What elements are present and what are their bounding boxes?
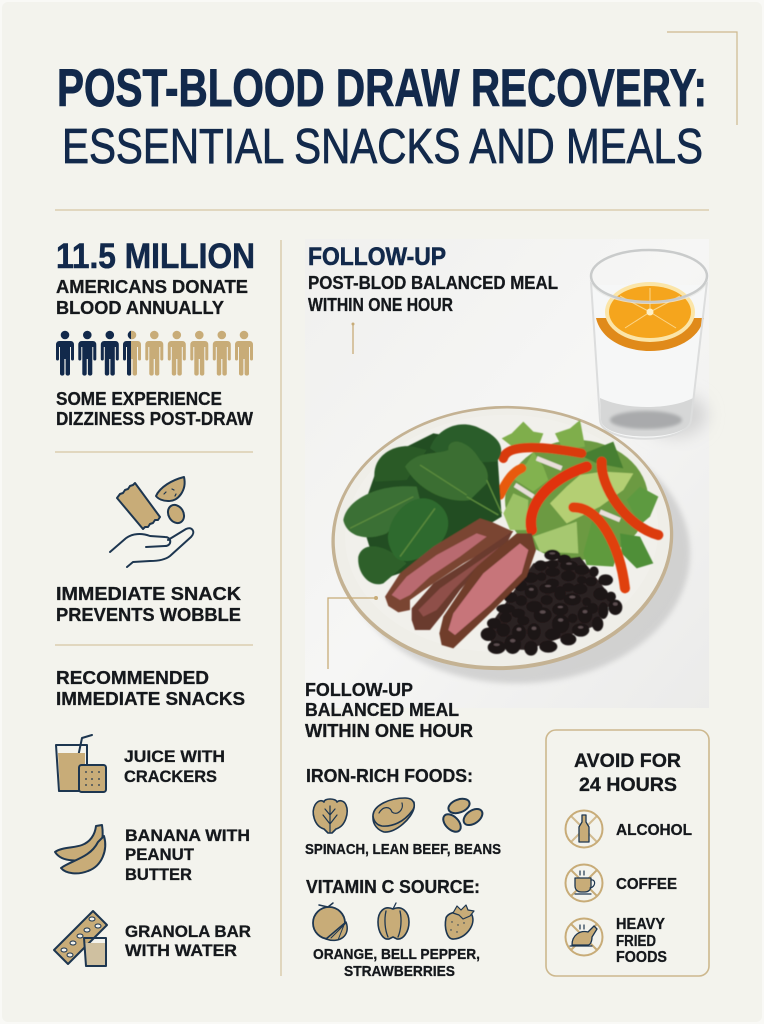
icon: snack falling into hand (110, 477, 193, 567)
icon: no fried foods (566, 918, 602, 956)
icon: no coffee (566, 864, 602, 902)
text: follow-up heading: POST-BLOD BALANCED MEAL (308, 273, 558, 293)
text: heavy fried foods: HEAVY (616, 916, 665, 933)
text: coffee: COFFEE (616, 876, 677, 893)
text: juice with crackers (124, 747, 225, 786)
panel: vitamin C foods (306, 877, 480, 980)
dizziness note: SOME EXPERIENCE (56, 388, 222, 409)
heading: recommended snacks (56, 667, 245, 709)
text: banana with peanut butter: PEANUT (125, 845, 195, 864)
statistic caption: AMERICANS DONATE (56, 276, 248, 297)
text: heavy fried foods (616, 916, 667, 966)
icon: bell pepper (378, 903, 409, 939)
text: follow-up meal callout (305, 680, 473, 741)
dizziness note: DIZZINESS POST-DRAW (56, 408, 253, 429)
salad (500, 420, 658, 588)
text: snack message: PREVENTS WOBBLE (56, 604, 241, 625)
icon: no alcohol (566, 810, 602, 848)
icon: granola bar with water (54, 911, 107, 966)
text: follow-up heading (308, 243, 558, 315)
text: snack message: IMMEDIATE SNACK (56, 583, 242, 604)
panel: donation statistic (56, 237, 255, 429)
dinner plate with food (325, 397, 690, 683)
heading: recommended snacks: IMMEDIATE SNACKS (56, 688, 245, 709)
icon: steak (373, 798, 414, 832)
heading: 24 HOURS (579, 775, 677, 796)
icon: beans (440, 796, 485, 835)
spinach (343, 424, 502, 584)
text: granola bar with water (125, 922, 251, 960)
corner accent (667, 32, 737, 125)
icon: juice with crackers (56, 735, 106, 792)
text: juice with crackers: JUICE WITH (124, 747, 225, 766)
text: juice with crackers: CRACKERS (124, 767, 217, 786)
callout leader: top (352, 322, 354, 354)
sliced steak (385, 518, 536, 648)
caption: STRAWBERRIES (344, 964, 455, 980)
headline number: 11.5 MILLION (56, 237, 255, 276)
text: banana with peanut butter: BANANA WITH (125, 826, 250, 845)
caption: ORANGE, BELL PEPPER, (313, 947, 480, 963)
text: banana with peanut butter: BUTTER (125, 865, 192, 884)
heading: VITAMIN C SOURCE: (306, 877, 480, 897)
icon: orange (313, 903, 347, 940)
text: follow-up heading: FOLLOW-UP (308, 243, 446, 271)
text: heavy fried foods: FRIED (616, 933, 656, 950)
icon: spinach (313, 799, 347, 833)
text: follow-up meal callout: BALANCED MEAL (305, 700, 459, 720)
icon: strawberry (445, 905, 474, 939)
caption: SPINACH, LEAN BEEF, BEANS (305, 842, 501, 858)
text: follow-up meal callout: WITHIN ONE HOUR (305, 721, 473, 741)
callout leader: plate (328, 596, 378, 669)
heading: IRON-RICH FOODS: (306, 766, 473, 786)
text: follow-up meal callout: FOLLOW-UP (305, 680, 413, 700)
panel: meal photograph (305, 239, 709, 708)
statistic caption: BLOOD ANNUALLY (56, 297, 225, 318)
heading (574, 751, 681, 796)
heading: AVOID FOR (574, 751, 681, 772)
text: alcohol: ALCOHOL (616, 822, 692, 839)
text: banana with peanut butter (125, 826, 250, 884)
glass of water with orange slice (591, 250, 708, 439)
heading: recommended snacks: RECOMMENDED (56, 667, 209, 688)
title (57, 59, 707, 174)
text: granola bar with water: WITH WATER (125, 941, 237, 960)
statistic caption (56, 276, 248, 318)
black beans (481, 550, 622, 656)
text: granola bar with water: GRANOLA BAR (125, 922, 251, 941)
icon: banana (55, 825, 105, 873)
caption (313, 947, 480, 980)
dizziness note (56, 388, 253, 429)
panel: avoid for 24 hours (546, 730, 709, 976)
text: follow-up heading: WITHIN ONE HOUR (308, 295, 453, 315)
pictogram: people (56, 331, 253, 376)
panel: iron-rich foods (305, 766, 501, 858)
text: heavy fried foods: FOODS (616, 949, 667, 966)
text: snack message (56, 583, 242, 625)
